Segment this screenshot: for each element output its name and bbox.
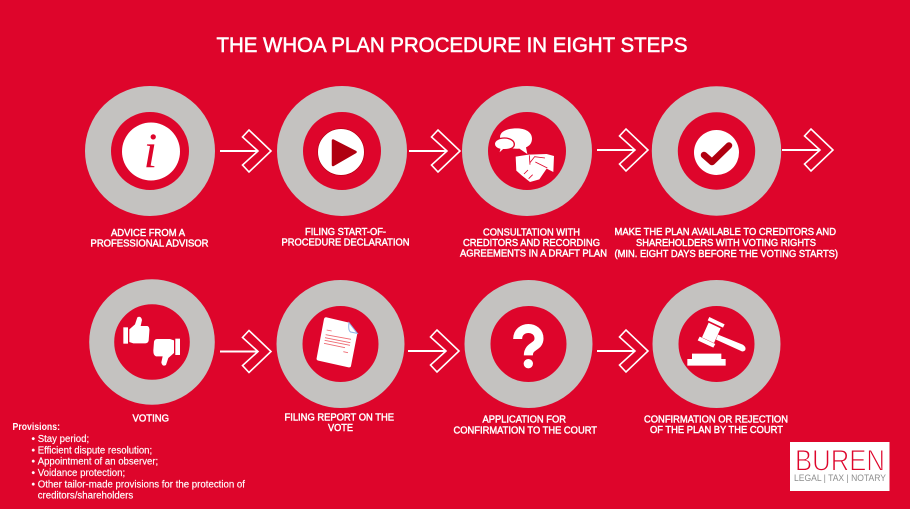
arrow 1 (220, 130, 271, 172)
arrow 6 (408, 330, 459, 372)
step 6 label (284, 412, 394, 434)
provisions list: Voidance protection; (38, 468, 125, 479)
step 7: application for confirmation (454, 293, 597, 436)
step 4 label: SHAREHOLDERS WITH VOTING RIGHTS (636, 238, 816, 249)
ring (475, 99, 579, 203)
step 1 label (90, 228, 208, 250)
step 7 label: APPLICATION FOR (482, 414, 566, 426)
ring (102, 292, 202, 392)
step 7 label (454, 414, 597, 436)
icon: information: i (144, 122, 157, 178)
ring (666, 293, 768, 395)
ring (478, 293, 580, 395)
step 2: filing start-of-procedure declaration (282, 99, 410, 248)
logo: Buren: BUREN (795, 444, 885, 478)
icon: question mark (518, 328, 539, 368)
icon: gavel (687, 317, 746, 366)
step 2 label (282, 227, 410, 248)
step 8 label: CONFIRMATION OR REJECTION (644, 414, 788, 426)
step 3: consultation with creditors (460, 99, 607, 260)
provisions list: • (32, 456, 36, 468)
step 4: make the plan available (614, 99, 838, 260)
icon: check mark (694, 130, 739, 175)
step 4 label: (MIN. EIGHT DAYS BEFORE THE VOTING STARTS) (614, 249, 838, 260)
step 6 label: VOTE (328, 423, 353, 434)
step 1 label: ADVICE FROM A (111, 228, 185, 239)
step 8 label: OF THE PLAN BY THE COURT (650, 425, 783, 436)
ring (290, 99, 394, 203)
provisions list: Efficient dispute resolution; (38, 445, 152, 456)
ring (290, 293, 392, 395)
step 5 label: VOTING (132, 414, 169, 424)
step 4 label: MAKE THE PLAN AVAILABLE TO CREDITORS AND (614, 227, 836, 238)
provisions list: • (32, 468, 36, 479)
provisions list: creditors/shareholders (38, 490, 133, 501)
step 3 label: CONSULTATION WITH (483, 228, 580, 238)
icon: thumbs up and thumbs down (123, 317, 180, 366)
arrow 7 (597, 330, 648, 372)
logo: Buren (790, 442, 890, 491)
ring (98, 99, 202, 203)
step 2 label: FILING START-OF- (305, 227, 386, 238)
icon: play button (318, 129, 364, 175)
step 1 label: PROFESSIONAL ADVISOR (90, 238, 208, 250)
step 1: advice from a professional advisor (90, 99, 208, 250)
step 3 label (460, 228, 607, 260)
step 2 label: PROCEDURE DECLARATION (282, 238, 410, 248)
icon: document (317, 317, 357, 367)
step 8: confirmation or rejection (644, 293, 788, 436)
provisions list: • (32, 479, 36, 490)
provisions list: Other tailor-made provisions for the protection of (38, 479, 245, 490)
step 7 label: CONFIRMATION TO THE COURT (454, 426, 597, 436)
arrow 2 (409, 130, 460, 172)
step 6: filing report on the vote (284, 293, 394, 434)
step 6 label: FILING REPORT ON THE (284, 412, 394, 424)
icon: information (122, 122, 180, 180)
arrow 5 (220, 330, 271, 372)
provisions list (12, 422, 245, 501)
arrow 4 (782, 129, 833, 171)
step 8 label (644, 414, 788, 436)
provisions list: Appointment of an observer; (38, 456, 158, 468)
provisions list: • (32, 434, 36, 445)
step 3 label: CREDITORS AND RECORDING (463, 238, 600, 249)
step 5: voting (102, 292, 202, 424)
icon: speech bubbles and handshake (494, 128, 554, 182)
step 3 label: AGREEMENTS IN A DRAFT PLAN (460, 248, 607, 260)
step 4 label (614, 227, 838, 260)
ring (665, 99, 768, 203)
arrow 3 (597, 129, 648, 171)
provisions list: • (32, 445, 36, 456)
provisions list: Provisions: (12, 422, 60, 433)
logo: Buren: LEGAL | TAX | NOTARY (794, 473, 887, 484)
provisions list: Stay period; (38, 434, 89, 445)
title: THE WHOA PLAN PROCEDURE IN EIGHT STEPS (216, 34, 688, 57)
